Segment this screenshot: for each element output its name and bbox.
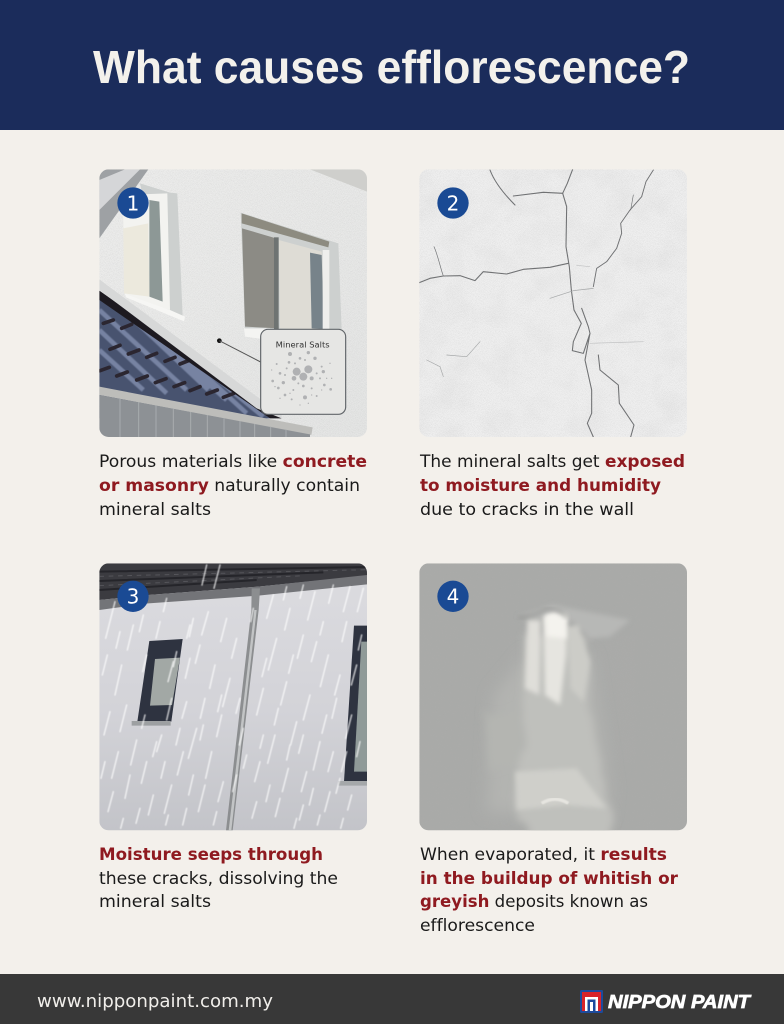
number badge 4: [437, 581, 469, 612]
text: step 3: Moisture seeps through: [99, 845, 323, 865]
panel 3: rain on wall: [99, 563, 367, 912]
rain streaks: [101, 565, 363, 828]
number badge 1: [117, 187, 149, 219]
right window: [344, 626, 367, 782]
photo: house wall and roof: [99, 169, 367, 437]
text: step 2: [419, 452, 685, 520]
photo: rain on house wall: [99, 563, 367, 830]
text: step 2: to moisture and humidity: [420, 476, 661, 496]
text: step 4: efflorescence: [420, 916, 535, 936]
text: step 2: The mineral salts get exposed: [419, 452, 685, 472]
photo: whitish deposits on grey wall: [419, 563, 687, 842]
text: step 4: When evaporated, it results: [420, 845, 667, 865]
number badge 2: 2: [447, 191, 459, 215]
number badge 3: 3: [127, 585, 139, 609]
text: step 1: [99, 452, 367, 520]
panel 4: efflorescence deposits: [419, 563, 687, 936]
small window: [137, 639, 183, 722]
number badge 2: [437, 187, 469, 219]
website url: www.nipponpaint.com.my: [37, 991, 273, 1012]
panel 2: cracked wall: [419, 169, 687, 520]
text: step 2: due to cracks in the wall: [420, 500, 634, 520]
logo: Nippon Paint: [580, 990, 752, 1013]
panel 1: porous wall with mineral salts: [99, 169, 367, 520]
number badge 1: 1: [127, 191, 139, 215]
text: step 3: these cracks, dissolving the: [99, 869, 338, 889]
number badge 3: [117, 581, 149, 612]
text: step 3: mineral salts: [99, 892, 211, 912]
logo: Nippon Paint: NIPPON PAINT: [608, 991, 752, 1012]
text: step 4: in the buildup of whitish or: [420, 869, 679, 889]
text: step 4: [420, 845, 679, 936]
title: What causes efflorescence?: [93, 41, 690, 93]
downpipe: [226, 588, 260, 830]
callout: mineral salts: Mineral Salts: [276, 339, 330, 349]
photo: cracks in wall: [419, 169, 687, 437]
text: step 1: or masonry naturally contain: [99, 476, 360, 496]
text: step 1: Porous materials like concrete: [99, 452, 367, 472]
footer band: [0, 974, 784, 1024]
text: step 4: greyish deposits known as: [420, 892, 648, 912]
header band: [0, 0, 784, 130]
callout: mineral salts: [217, 329, 346, 414]
number badge 4: 4: [447, 585, 459, 609]
text: step 1: mineral salts: [99, 500, 211, 520]
text: step 3: [99, 845, 338, 912]
